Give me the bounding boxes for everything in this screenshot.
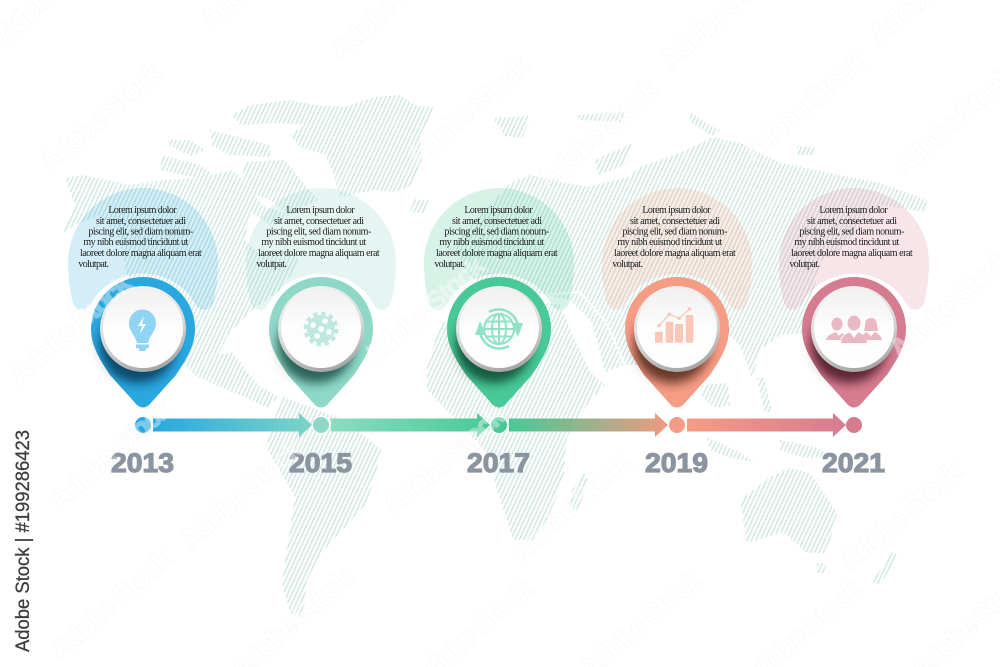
text block 2019: laoreet dolore magna aliquam erat: [614, 248, 736, 259]
marker 2015: [313, 417, 329, 433]
watermarks: Adobe Stock: [834, 455, 968, 577]
arrow 2015 to 2017: [331, 413, 490, 437]
arrow 2013 to 2015: [153, 413, 312, 437]
map: Iceland: [410, 199, 430, 213]
text block 2015: laoreet dolore magna aliquam erat: [258, 248, 380, 259]
marker 2013: [135, 417, 151, 433]
halo 2021: [779, 188, 929, 310]
text block 2021: [789, 205, 913, 270]
map: Arctic islands: [160, 130, 318, 215]
marker 2019: [669, 417, 685, 433]
text block 2019: Lorem ipsum dolor: [642, 205, 711, 216]
text block 2019: my nibh euismod tincidunt ut: [617, 237, 723, 248]
map: Madagascar: [570, 473, 588, 510]
text block 2017: laoreet dolore magna aliquam erat: [436, 248, 558, 259]
text block 2019: volutpat.: [612, 259, 643, 270]
halo 2015: [246, 188, 396, 310]
text block 2017: Lorem ipsum dolor: [464, 205, 533, 216]
text block 2019: sit amet, consectetuer adi: [630, 216, 720, 227]
watermarks: Adobe Stock: [357, 250, 491, 372]
text block 2015: volutpat.: [256, 259, 287, 270]
text block 2017: [434, 205, 558, 270]
text block 2013: laoreet dolore magna aliquam erat: [80, 248, 202, 259]
text block 2015: sit amet, consectetuer adi: [274, 216, 364, 227]
map: Arctic Eurasian islands: [493, 112, 815, 175]
arrow 2017 to 2019: [509, 413, 668, 437]
map: Tasmania: [816, 563, 826, 573]
text block 2021: volutpat.: [789, 259, 820, 270]
watermarks: Adobe Stock: [401, 50, 535, 172]
text block 2021: sit amet, consectetuer adi: [807, 216, 897, 227]
year 2021: 2021: [822, 448, 885, 478]
pin 2019: [625, 277, 729, 408]
map: Australia: [740, 468, 837, 553]
text block 2021: piscing elit, sed diam nonum-: [799, 226, 904, 238]
text block 2015: piscing elit, sed diam nonum-: [266, 226, 371, 238]
map: Southeast Asia islands: [700, 378, 833, 462]
icon: lightbulb: [129, 310, 156, 351]
striped world map: [60, 95, 927, 617]
text block 2017: piscing elit, sed diam nonum-: [444, 226, 549, 238]
pin 2013: [91, 277, 195, 408]
marker 2017: [491, 417, 507, 433]
text block 2021: laoreet dolore magna aliquam erat: [791, 248, 913, 259]
watermarks: Adobe Stock: [504, 446, 638, 568]
icon: globe with arrows: [475, 309, 523, 349]
stock id label: Adobe Stock | #199286423: [13, 430, 34, 652]
watermarks: Adobe Stock: [377, 400, 511, 522]
map: Africa: [427, 300, 605, 540]
icon: bar chart: [655, 307, 693, 343]
text block 2019: piscing elit, sed diam nonum-: [622, 226, 727, 238]
text block 2019: [612, 205, 736, 270]
watermarks: Adobe Stock: [44, 543, 178, 665]
arrow 2019 to 2021: [687, 413, 846, 437]
text block 2013: Lorem ipsum dolor: [108, 205, 177, 216]
icon: gear: [306, 314, 336, 344]
map: New Zealand: [872, 552, 899, 585]
halo 2013: [68, 188, 218, 310]
watermarks: Adobe Stock: [174, 433, 308, 555]
text block 2021: my nibh euismod tincidunt ut: [794, 237, 900, 248]
halo 2017: [424, 188, 574, 310]
pin 2015: [269, 277, 373, 408]
year 2017: 2017: [467, 448, 530, 478]
text block 2013: piscing elit, sed diam nonum-: [88, 226, 193, 238]
text block 2017: volutpat.: [434, 259, 465, 270]
year 2015: 2015: [289, 448, 352, 478]
halo 2019: [602, 188, 752, 310]
text block 2013: sit amet, consectetuer adi: [96, 216, 186, 227]
map: North America: [60, 170, 300, 408]
text block 2021: Lorem ipsum dolor: [819, 205, 888, 216]
text block 2015: [256, 205, 380, 270]
text block 2015: my nibh euismod tincidunt ut: [261, 237, 367, 248]
map: South America: [267, 397, 382, 617]
watermarks: Adobe Stock: [44, 393, 178, 515]
watermarks: Adobe Stock: [34, 56, 168, 178]
text block 2013: [78, 205, 202, 270]
text block 2015: Lorem ipsum dolor: [286, 205, 355, 216]
marker 2021: [846, 417, 862, 433]
text block 2017: my nibh euismod tincidunt ut: [439, 237, 545, 248]
pin 2017: [447, 277, 551, 408]
map: Greenland: [232, 95, 435, 197]
text block 2013: volutpat.: [78, 259, 109, 270]
text block 2017: sit amet, consectetuer adi: [452, 216, 542, 227]
pin 2021: [802, 277, 906, 408]
year 2019: 2019: [645, 448, 708, 478]
year 2013: 2013: [111, 448, 174, 478]
timeline: [135, 413, 862, 437]
watermarks: Adobe Stock: [4, 268, 138, 390]
icon: people: [826, 316, 882, 343]
watermarks: Adobe Stock: [737, 46, 871, 168]
text block 2013: my nibh euismod tincidunt ut: [83, 237, 189, 248]
speech halos: [68, 188, 929, 310]
watermarks: Adobe Stock: [531, 73, 665, 195]
sea gaps on map: [450, 292, 628, 372]
map: Eurasia: [455, 137, 927, 408]
